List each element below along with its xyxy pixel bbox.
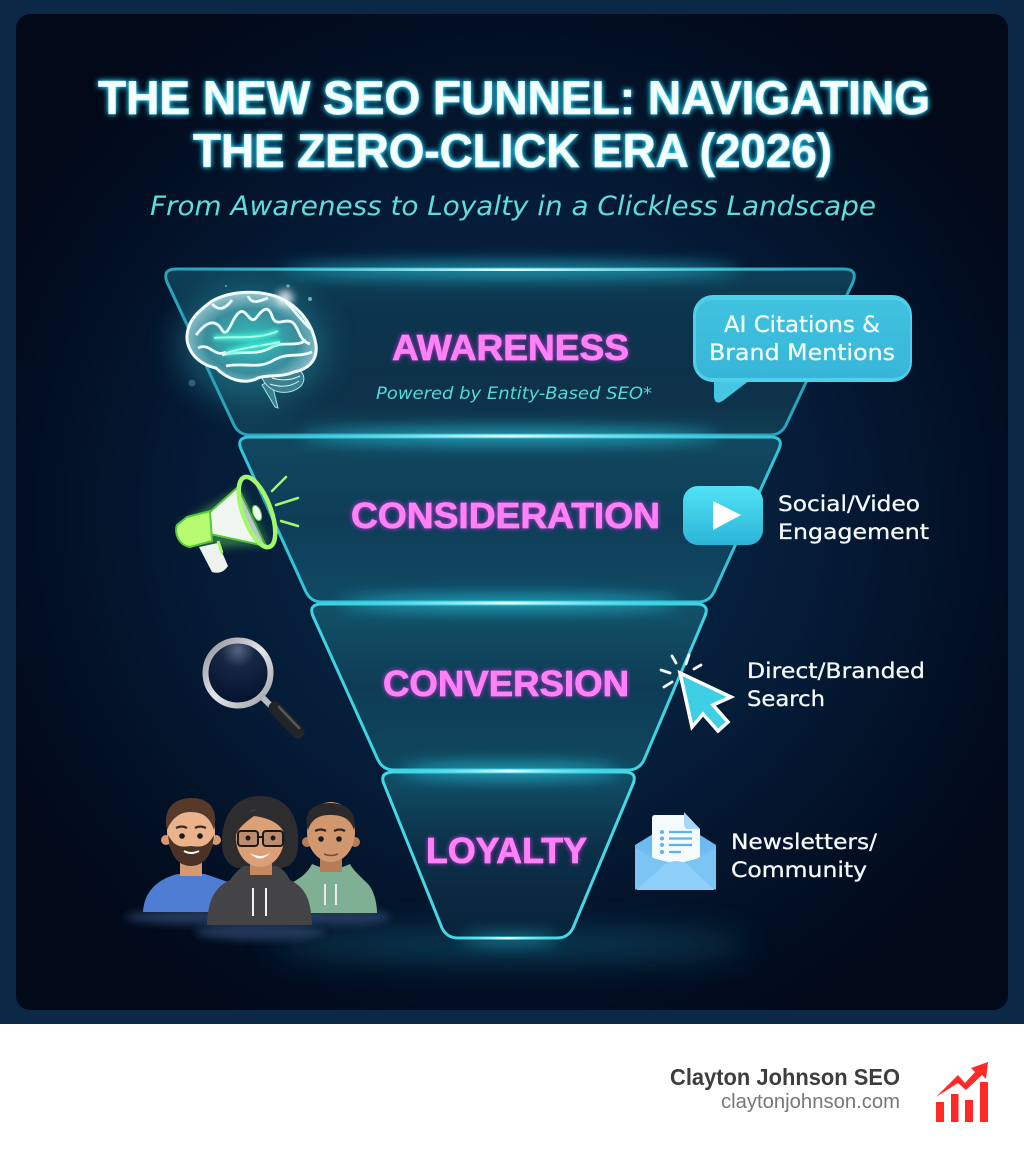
text: direct/branded search: [747, 659, 925, 711]
callout: AI citations: AI Citations &: [724, 313, 880, 338]
title: THE ZERO-CLICK ERA (2026): [193, 124, 832, 177]
tier: consideration: [240, 437, 780, 602]
funnel: [166, 263, 854, 959]
icon: megaphone: [176, 472, 298, 573]
label: loyalty: LOYALTY: [426, 830, 587, 871]
person: woman with glasses in black hoodie: [195, 796, 325, 940]
label: consideration: CONSIDERATION: [351, 495, 660, 536]
text: newsletters/community: Newsletters/: [731, 830, 878, 854]
icon: brain: [178, 284, 326, 408]
funnel bottom glow: [270, 931, 750, 959]
text: social/video engagement: [778, 492, 929, 544]
text: newsletters/community: Community: [731, 858, 867, 882]
footer logo: rising chart: [936, 1062, 988, 1122]
icon: play button: [683, 486, 763, 545]
footer brand name: Clayton Johnson SEO: [670, 1064, 900, 1090]
icon: magnifying glass: [206, 640, 299, 732]
label: conversion: CONVERSION: [383, 663, 629, 704]
tier: loyalty: [383, 772, 634, 938]
person: man in green hoodie: [293, 802, 390, 925]
footer white band: [0, 1024, 1024, 1154]
text: social/video engagement: Engagement: [778, 520, 929, 544]
title: THE NEW SEO FUNNEL: NAVIGATING: [98, 71, 930, 124]
text: newsletters/community: [731, 830, 878, 882]
icon: cursor: [661, 655, 731, 731]
text: social/video engagement: Social/Video: [778, 492, 920, 516]
tier: awareness: [166, 269, 854, 435]
sublabel: entity-based SEO: Powered by Entity-Based SEO*: [376, 384, 652, 404]
funnel edge glows: [180, 263, 840, 944]
callout: AI citations: Brand Mentions: [709, 341, 895, 366]
icon: people group: [125, 796, 390, 940]
subtitle: From Awareness to Loyalty in a Clickless Landscape: [150, 191, 876, 222]
tier: conversion: [312, 604, 706, 770]
footer url: claytonjohnson.com: [721, 1091, 900, 1113]
person: bearded man in blue: [125, 798, 325, 925]
callout: AI citations: [693, 295, 912, 403]
icon: envelope: [635, 812, 716, 890]
text: direct/branded search: Search: [747, 687, 825, 711]
text: direct/branded search: Direct/Branded: [747, 659, 925, 683]
title: [98, 71, 930, 177]
label: awareness: AWARENESS: [392, 327, 629, 368]
